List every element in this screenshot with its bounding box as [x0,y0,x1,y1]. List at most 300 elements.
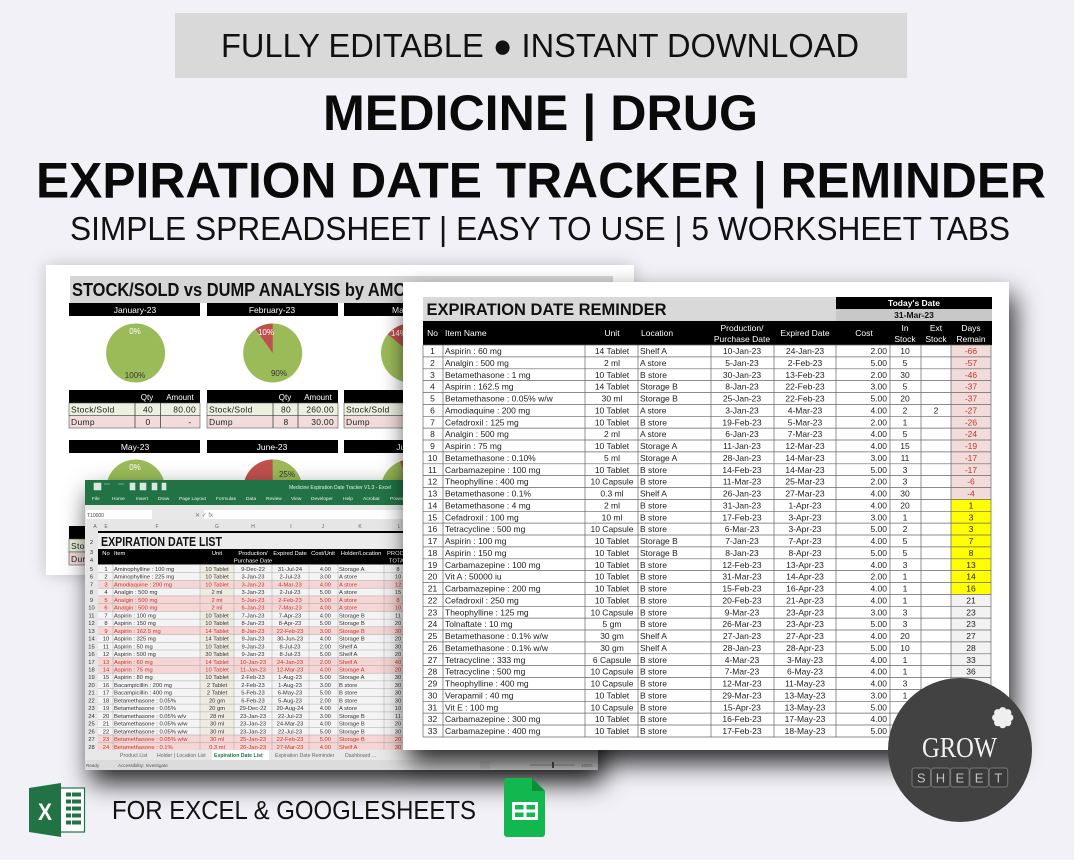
reminder table rows: Carbamazepine : 300 mg [445,714,541,724]
reminder table rows: 15-Apr-23 [723,702,761,712]
expiration date list rows: 17 [88,660,95,666]
reminder table rows: 4.00 [870,560,887,570]
expiration date list rows: Betamethasone : 0.1% [114,745,173,751]
expiration date list rows: 20 [103,714,109,720]
expiration date list rows: 5.00 [320,737,331,743]
expiration date list rows: 25-Jan-23 [240,737,266,743]
month: February: Amount [304,393,333,402]
expiration date list rows: 9-Jan-23 [242,652,264,658]
reminder table rows: Theophylline : 400 mg [445,477,529,487]
month: February: Dump [209,417,233,427]
expiration date list rows: 5 [104,598,108,604]
excel ribbon: Draw [158,496,170,502]
expiration date list rows: 4.00 [320,637,331,643]
expiration date list rows: 2 [104,575,108,581]
reminder table rows: 20 [900,394,910,404]
reminder table rows: 3.00 [870,690,887,700]
expiration date list rows: 19 [88,675,95,681]
expiration date list rows: 1-Aug-23 [278,683,302,689]
reminder table rows: 12 [428,477,437,487]
reminder table rows: 10 Tablet [595,714,630,724]
expiration date list rows: Amodiaquine : 200 mg [114,582,172,588]
reminder table rows: -27 [965,405,977,415]
formula bar and column headers: T10000 [87,513,104,519]
expiration date list rows: 12-Mar-23 [277,668,303,674]
month: January: 100% [125,371,145,380]
reminder table rows: 14-Mar-23 [785,453,825,463]
expiration date list rows: Shelf A [339,660,358,666]
reminder table rows: 7 [969,536,974,546]
expiration date list rows: 20 gm [209,706,225,712]
reminder table rows: 4.00 [870,631,887,641]
icon: google sheets [504,778,545,837]
month: February [207,303,338,428]
worksheet tabs: Expiration Date Reminder [275,753,335,759]
reminder table rows: 0.3 ml [600,488,624,498]
expiration date list rows: 30 [395,675,401,681]
expiration date list rows: 11 [103,644,109,650]
expiration date list rows: 2 ml [212,590,222,596]
reminder table rows: 8-Apr-23 [788,548,822,558]
reminder table rows: 5.00 [870,726,887,736]
list table header: Purchase Date [234,558,272,564]
reminder table rows: Theophylline : 125 mg [445,607,529,617]
expiration date list rows: 10 [395,706,401,712]
expiration date list rows: 5-Aug-23 [278,698,302,704]
sheet heading: 2 [90,540,93,546]
logo: grow sheet: GROW [922,732,998,764]
expiration date list rows: 17 [103,691,109,697]
reminder table rows: 31-Mar-23 [722,572,762,582]
reminder table rows: 13-May-23 [785,702,826,712]
reminder table rows: B store [640,619,667,629]
month: January: 80.00 [173,404,196,414]
reminder table rows: B store [640,667,667,677]
sheet letter tiles: H [936,770,945,786]
reminder table rows: Betamethasone : 0.1% w/w [445,631,549,641]
sheet heading: 4 [90,558,94,564]
reminder table rows: 30 ml [602,394,622,404]
reminder table rows: B store [640,690,667,700]
reminder table rows: 2.00 [870,477,887,487]
reminder table rows: 10-Jan-23 [723,346,761,356]
reminder table rows: 30 gm [600,631,624,641]
expiration date list rows: 23-Jan-23 [240,714,266,720]
expiration date list rows: 20 [395,637,401,643]
reminder table rows: A store [640,358,667,368]
reminder table rows: 5.00 [870,702,887,712]
reminder table rows: Storage B [640,394,678,404]
reminder table rows: Storage B [640,382,678,392]
reminder table rows: 10 [900,643,910,653]
reminder table rows: 10 [428,453,437,463]
reminder table rows: B store [640,572,667,582]
expiration date list rows: 5.00 [320,691,331,697]
reminder table rows: 3 [903,607,908,617]
reminder table rows: 3.00 [870,607,887,617]
expiration date list rows: B store [339,691,357,697]
title line 1: MEDICINE | DRUG [323,85,758,142]
reminder table rows: 14-Apr-23 [786,572,824,582]
reminder table rows: 13 [428,488,437,498]
excel ribbon: Review [266,496,282,502]
month: January: Dump [71,417,95,427]
expiration date list rows: 7-Apr-23 [279,613,301,619]
reminder table rows: 3 [969,512,974,522]
expiration date list rows: 5.00 [320,598,331,604]
month: January: Amount [166,393,195,402]
reminder table rows: -17 [965,453,977,463]
reminder table rows: 22-Feb-23 [785,382,825,392]
excel ribbon: Home [112,496,125,502]
reminder table rows: B store [640,524,667,534]
expiration date list rows: 22-Jul-23 [278,729,302,735]
reminder table rows: 10 Tablet [595,726,630,736]
excel ribbon: File [92,496,100,502]
reminder table rows: Betamethasone : 0.1% w/w [445,643,549,653]
expiration date list rows: 26-Jan-23 [240,745,266,751]
expiration date list rows: 21 [103,722,109,728]
expiration date list rows: 10 Tablet [205,567,229,573]
expiration date list rows: 19 [103,706,109,712]
expiration date list rows: 9-Dec-22 [241,567,265,573]
expiration date list rows: 20-Aug-24 [276,706,304,712]
reminder table rows: 19 [428,560,437,570]
reminder table rows: 7 [430,417,435,427]
reminder table rows: 10 Capsule [590,702,634,712]
expiration date list rows: 23 [103,737,109,743]
expiration date list rows: 3-Jan-23 [242,590,264,596]
expiration date list rows: 2 ml [212,598,222,604]
excel ribbon: Help [343,496,353,502]
reminder table grid [423,345,991,737]
reminder table rows: Storage B [640,536,678,546]
excel ribbon [85,480,598,505]
expiration date list rows: 3.00 [320,629,331,635]
reminder table rows: Vit A : 50000 iu [445,572,502,582]
expiration date list rows: 30 [395,745,401,751]
expiration date list rows: Aminophylline : 100 mg [114,567,174,573]
formula bar and column headers: K [358,524,362,530]
reminder table rows: 4.00 [870,595,887,605]
expiration date list rows: 15 [103,675,109,681]
expiration date list rows: 9-Jan-23 [242,644,264,650]
reminder table rows: -37 [965,394,977,404]
reminder table rows: 10 Tablet [595,441,630,451]
reminder table rows: 33 [428,726,437,736]
reminder table rows: 20 [428,572,437,582]
reminder table rows: 17-May-23 [785,714,826,724]
reminder table rows: 16-Apr-23 [786,584,824,594]
reminder table rows: B store [640,607,667,617]
expiration date list rows: 26 [88,729,95,735]
reminder table rows: 1 [903,417,908,427]
excel ribbon: Page Layout [179,496,207,502]
reminder table rows: 10 Tablet [595,465,630,475]
expiration date list rows: Betamethasone : 0.05% w/w [114,729,188,735]
expiration date list rows: Storage B [339,637,365,643]
expiration date list rows: 5.00 [320,590,331,596]
reminder table rows: Cefadroxil : 250 mg [445,595,519,605]
reminder table rows: B store [640,726,667,736]
expiration date list rows: 3.00 [320,575,331,581]
expiration date list rows: 22 [88,698,95,704]
expiration date list rows: 4.00 [320,706,331,712]
reminder table rows: 5.00 [870,524,887,534]
expiration date list rows: Storage B [339,729,365,735]
expiration date list rows: Betamethasone : 0.05% [114,698,176,704]
reminder table rows: 16 [966,584,976,594]
expiration date list rows: 29-Dec-22 [239,706,267,712]
excel ribbon: Insert [136,496,149,502]
expiration date list rows: 24 [88,714,95,720]
reminder table rows: 16-Feb-23 [722,714,762,724]
expiration date list rows: 18 [103,698,109,704]
reminder table rows: 2 ml [604,358,620,368]
reminder table rows: 5 [903,358,908,368]
reminder table rows: 30 [428,690,437,700]
title line 2: EXPIRATION DATE TRACKER | REMINDER [36,152,1046,210]
expiration date list rows: 30-Jun-23 [277,637,303,643]
reminder table rows: 10 Tablet [595,572,630,582]
icon: excel: X [38,799,52,826]
excel ribbon: Developer [311,496,333,502]
reminder table rows: 26 [428,643,437,653]
formula bar and column headers: L [398,524,401,530]
reminder table rows: 11-May-23 [785,678,825,688]
reminder table rows: 3 [430,370,435,380]
expiration date list rows: Aminophylline : 225 mg [114,575,174,581]
reminder table rows: 23 [966,619,976,629]
excel ribbon: Acrobat [363,496,380,502]
expiration date list rows: 24 [103,745,110,751]
reminder table rows: 27 [428,655,437,665]
reminder table rows: 23 [966,607,976,617]
expiration date list rows: 4-Mar-23 [278,582,302,588]
reminder table rows: 7-Apr-23 [788,536,822,546]
today's date box: 31-Mar-23 [894,310,934,320]
reminder table rows: 22-Feb-23 [785,394,825,404]
reminder heading [423,297,836,321]
reminder table rows: 5.00 [870,548,887,558]
reminder heading: EXPIRATION DATE REMINDER [426,300,666,319]
reminder table rows: 29 [428,678,437,688]
worksheet tabs: Dashboard ... [345,753,376,759]
expiration date list rows: 5 [90,567,93,573]
expiration date list rows: 6-May-23 [278,691,302,697]
formula bar and column headers: ✕ ✓ fx [195,513,213,519]
reminder table rows: -57 [965,358,977,368]
reminder table rows: 8-Jan-23 [725,382,759,392]
reminder table rows: 30-Jan-23 [723,370,761,380]
status bar: Accessibility: Investigate [118,763,168,768]
reminder table rows: 6-May-23 [787,667,823,677]
expiration date list rows: 2.00 [320,644,331,650]
reminder table rows: -6 [967,477,975,487]
reminder table header: Location [641,328,673,338]
expiration date list rows: Aspirin : 80 mg [114,675,153,681]
worksheet tabs: Product List [120,753,148,759]
month: March: Stock/Sold [346,404,390,414]
expiration date list rows: Storage B [339,621,365,627]
expiration date list rows: 40 [395,660,401,666]
reminder table rows: 25-Mar-23 [785,477,825,487]
reminder table rows: -24 [965,429,977,439]
reminder table rows: 14 [966,572,976,582]
expiration date list rows: 9 [104,629,108,635]
expiration date list rows: 4.00 [320,582,331,588]
reminder table rows: 24-Jan-23 [786,346,824,356]
reminder table rows: 2.00 [870,417,887,427]
reminder table rows: 3 [903,560,908,570]
reminder table rows: 2 ml [604,429,620,439]
reminder table rows: Analgin : 500 mg [445,429,509,439]
reminder table header: Cost [855,328,873,338]
reminder table rows [428,346,977,736]
reminder table rows: Storage B [640,548,678,558]
formula bar and column headers: G [215,524,219,530]
reminder table rows: 4.00 [870,714,887,724]
expiration date list rows: A store [339,582,357,588]
reminder table rows: -26 [965,417,977,427]
reminder table rows: 3.00 [870,453,887,463]
expiration date list rows: 21 [88,691,95,697]
reminder table rows: 10 Tablet [595,548,630,558]
reminder table rows: 10 Tablet [595,584,630,594]
month: February: Stock/Sold [209,404,253,414]
reminder table rows: Theophylline : 400 mg [445,678,529,688]
top banner: FULLY EDITABLE ● INSTANT DOWNLOAD [221,28,859,65]
month: February: 30.00 [311,417,334,427]
reminder table rows: 30 gm [600,643,624,653]
reminder table rows: Analgin : 500 mg [445,358,509,368]
sheet letter tiles: E [955,770,964,786]
expiration date list rows: Storage B [339,737,365,743]
reminder table rows: 30 [900,370,910,380]
reminder table rows: 14-Feb-23 [722,465,762,475]
reminder table rows: 21-Apr-23 [786,595,824,605]
expiration date list rows: 7 [104,613,108,619]
expiration date list rows: 22-Feb-23 [277,737,303,743]
reminder table rows: 5.00 [870,358,887,368]
reminder table rows: 17-Feb-23 [722,726,762,736]
month: January: Stock/Sold [71,404,115,414]
reminder table rows: 5 [903,536,908,546]
reminder table rows: Tolnaftate : 10 mg [445,619,513,629]
reminder table rows: 15 [428,512,437,522]
reminder table rows: 2 [903,405,908,415]
reminder table rows: 2 ml [604,500,620,510]
reminder table rows: 11 [901,453,910,463]
month: January: Qty [141,393,153,402]
reminder table rows: 5.00 [870,465,887,475]
month: March [344,303,475,428]
expiration date list rows: 30 ml [210,729,224,735]
reminder table rows: -46 [965,370,977,380]
reminder table rows: 14 [428,500,437,510]
reminder table rows: 4.00 [870,678,887,688]
reminder table rows: 14 Tablet [595,346,630,356]
expiration date list rows: Storage B [339,722,365,728]
expiration date list rows: 12 [88,621,95,627]
reminder table rows: 1 [903,667,908,677]
list table header: TOTAL [389,558,408,564]
sheet letter tiles: S [917,770,926,786]
expiration date list rows: Storage B [339,629,365,635]
icon: flower [992,707,1013,728]
expiration date list rows: 30 [395,644,401,650]
reminder table rows: Verapamil : 40 mg [445,690,514,700]
expiration date list rows: Aspirin : 75 mg [114,668,153,674]
expiration date list rows: 14 Tablet [205,660,229,666]
expiration date list rows: 1 [104,567,108,573]
reminder table rows: 5-Jan-23 [725,358,759,368]
subtitle: SIMPLE SPREADSHEET | EASY TO USE | 5 WORKSHEET TABS [70,210,1010,247]
expiration date list rows: 4.00 [320,606,331,612]
reminder table rows: B store [640,477,667,487]
expiration date list rows: 30 [395,691,401,697]
expiration date list rows: 10 Tablet [205,644,229,650]
month: March: Dump [346,417,370,427]
expiration date list rows: Aspirin : 500 mg [114,652,156,658]
reminder table rows: Betamethasone : 4 mg [445,500,531,510]
reminder table rows: 11-Jan-23 [723,441,761,451]
excel ribbon: Power [390,496,404,502]
reminder table rows: 12-Feb-23 [722,560,762,570]
expiration date list rows: Aspirin : 162.5 mg [114,629,161,635]
reminder table rows: 13-May-23 [785,690,826,700]
reminder table rows: 2.00 [870,572,887,582]
expiration date list rows: 4.00 [320,668,331,674]
expiration date list rows: 10 Tablet [205,621,229,627]
reminder table rows: 17-Feb-23 [722,512,762,522]
reminder table rows: 10 [900,346,910,356]
expiration date list rows: 28 [88,745,95,751]
expiration date list rows: 3-Jan-23 [242,575,264,581]
expiration date list rows: Storage A [339,675,365,681]
reminder table rows: 23-Apr-23 [786,619,824,629]
list table header: Expired Date [273,551,307,557]
expiration date list rows: 2.00 [320,660,331,666]
expiration date list rows: 2-Jul-23 [280,575,300,581]
expiration date list rows: B store [339,683,357,689]
formula bar and column headers: I [290,524,292,530]
reminder table rows: 3-Apr-23 [788,512,822,522]
expiration date list rows: 3 [104,582,108,588]
expiration date list rows: Bacampicillin : 400 mg [114,691,172,697]
reminder table rows: 27-Apr-23 [786,631,824,641]
expiration date list rows: A store [339,706,357,712]
month: May: Dur [71,554,86,564]
expiration date list rows: 6-Jan-23 [242,606,264,612]
reminder table rows: B store [640,584,667,594]
reminder table rows: 13 [966,560,976,570]
reminder table rows: 3-May-23 [787,655,823,665]
reminder table rows: Shelf A [640,643,667,653]
sheet heading [90,531,598,564]
expiration date list rows: 7-Mar-23 [278,606,302,612]
reminder table rows: 14-Mar-23 [785,465,825,475]
list table header: Item [114,551,125,557]
reminder table rows: 36 [966,667,976,677]
expiration date list rows: A store [339,575,357,581]
month: March: March-23 [392,305,428,315]
reminder table rows: 10 Capsule [590,607,634,617]
reminder table rows: 6-Mar-23 [725,524,760,534]
expiration date list rows: 10 Tablet [205,582,229,588]
reminder table rows: 10 Tablet [595,690,630,700]
expiration date list rows: 20 [395,722,401,728]
